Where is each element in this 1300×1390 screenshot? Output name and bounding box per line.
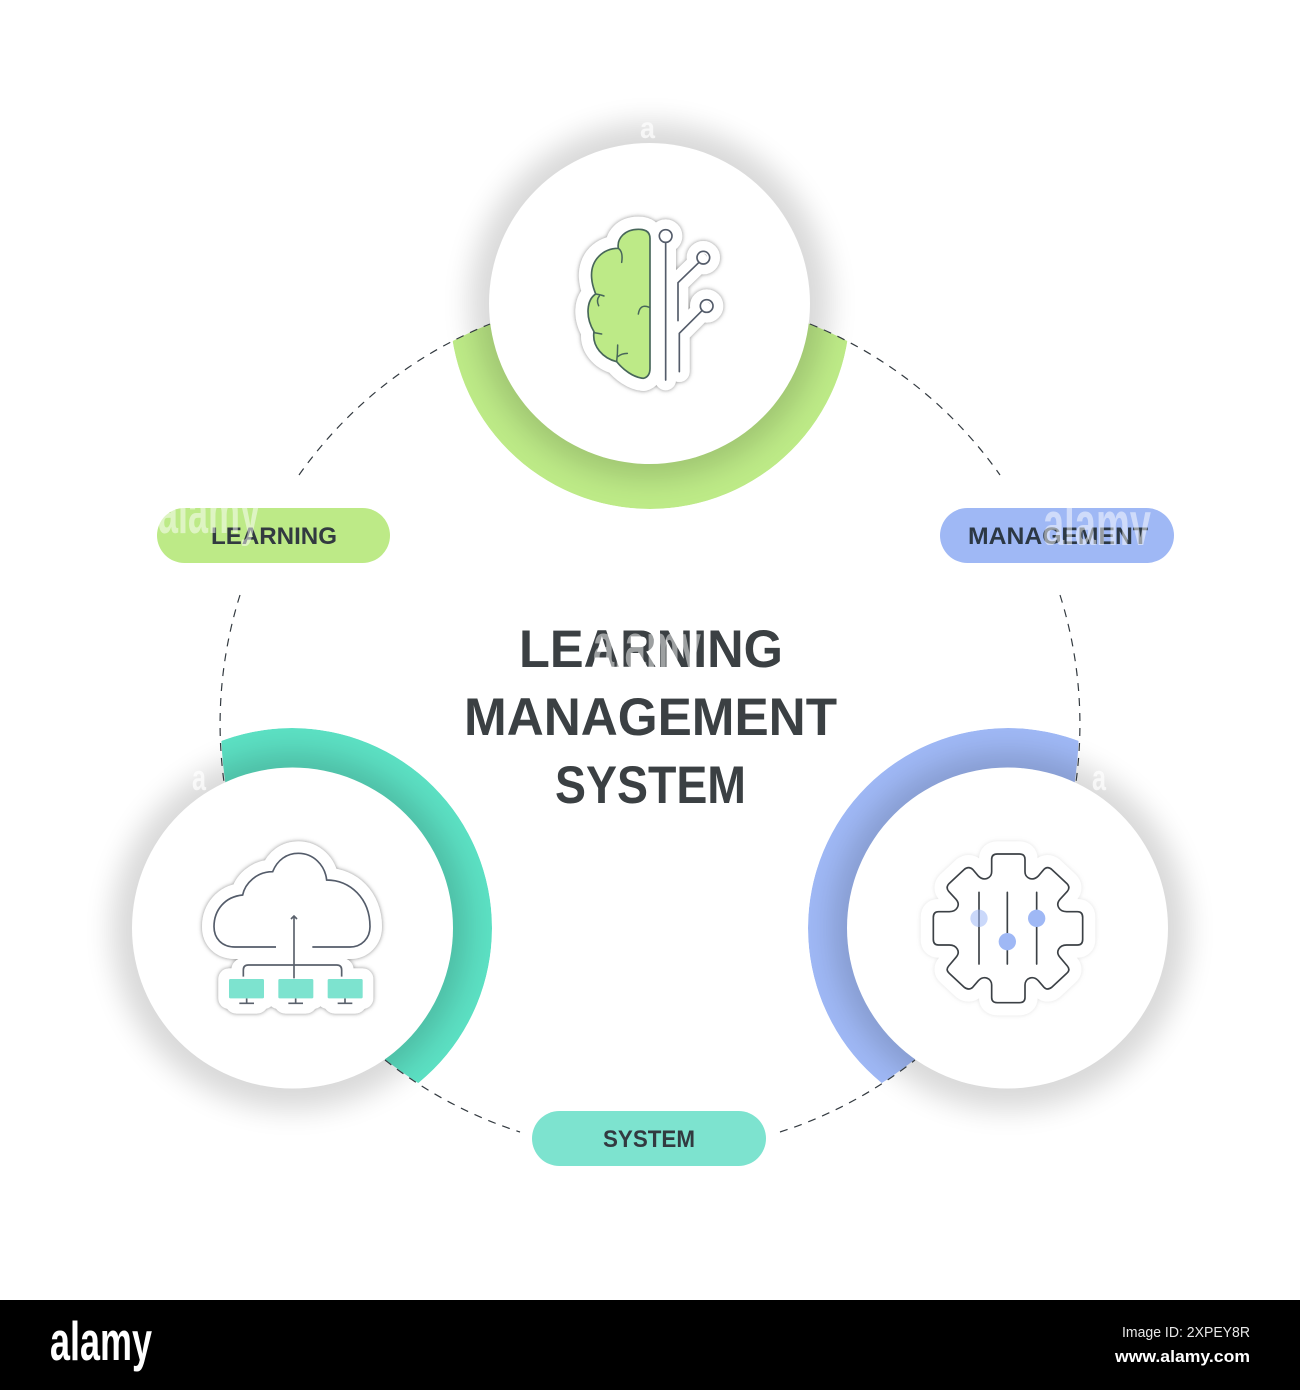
title: MANAGEMENT (464, 688, 837, 747)
ring: management (blue) (808, 728, 1078, 1083)
title: LEARNING (519, 620, 783, 679)
circle shadows outside the connector circle (112, 123, 1188, 1110)
ring: learning (green) (452, 324, 848, 509)
footer url: www.alamy.com (1114, 1347, 1250, 1366)
label pill: management (940, 508, 1174, 563)
stock watermarks: alamy (593, 612, 701, 681)
label pill: system (532, 1111, 766, 1166)
stock watermarks: alamy (1043, 490, 1151, 559)
dashed connector circle (220, 324, 1080, 1132)
ring: system (teal) (221, 728, 492, 1083)
stock watermarks: a (640, 112, 655, 145)
icon: cloud network (214, 853, 370, 1003)
icon: brain with circuit (588, 229, 713, 380)
circle panel: learning brain (489, 143, 810, 464)
stock watermarks: a (1092, 757, 1107, 798)
label pill: learning: LEARNING (211, 523, 337, 550)
circle panel: system cloud (132, 768, 453, 1088)
title (464, 620, 837, 815)
stock watermarks: a (192, 757, 207, 798)
icon: gear with sliders (933, 854, 1083, 1003)
stock watermarks (158, 112, 1151, 798)
label pill: management: MANAGEMENT (968, 523, 1148, 550)
label pill: system: SYSTEM (603, 1126, 695, 1153)
stock watermarks: alamy (158, 478, 260, 547)
title: SYSTEM (555, 756, 746, 815)
circle panel: management gear (847, 768, 1168, 1088)
label pill: learning (157, 508, 390, 563)
footer logo: alamy (50, 1310, 152, 1372)
footer image id: Image ID: 2XPEY8R (1122, 1324, 1250, 1341)
footer bar (0, 1300, 1300, 1390)
